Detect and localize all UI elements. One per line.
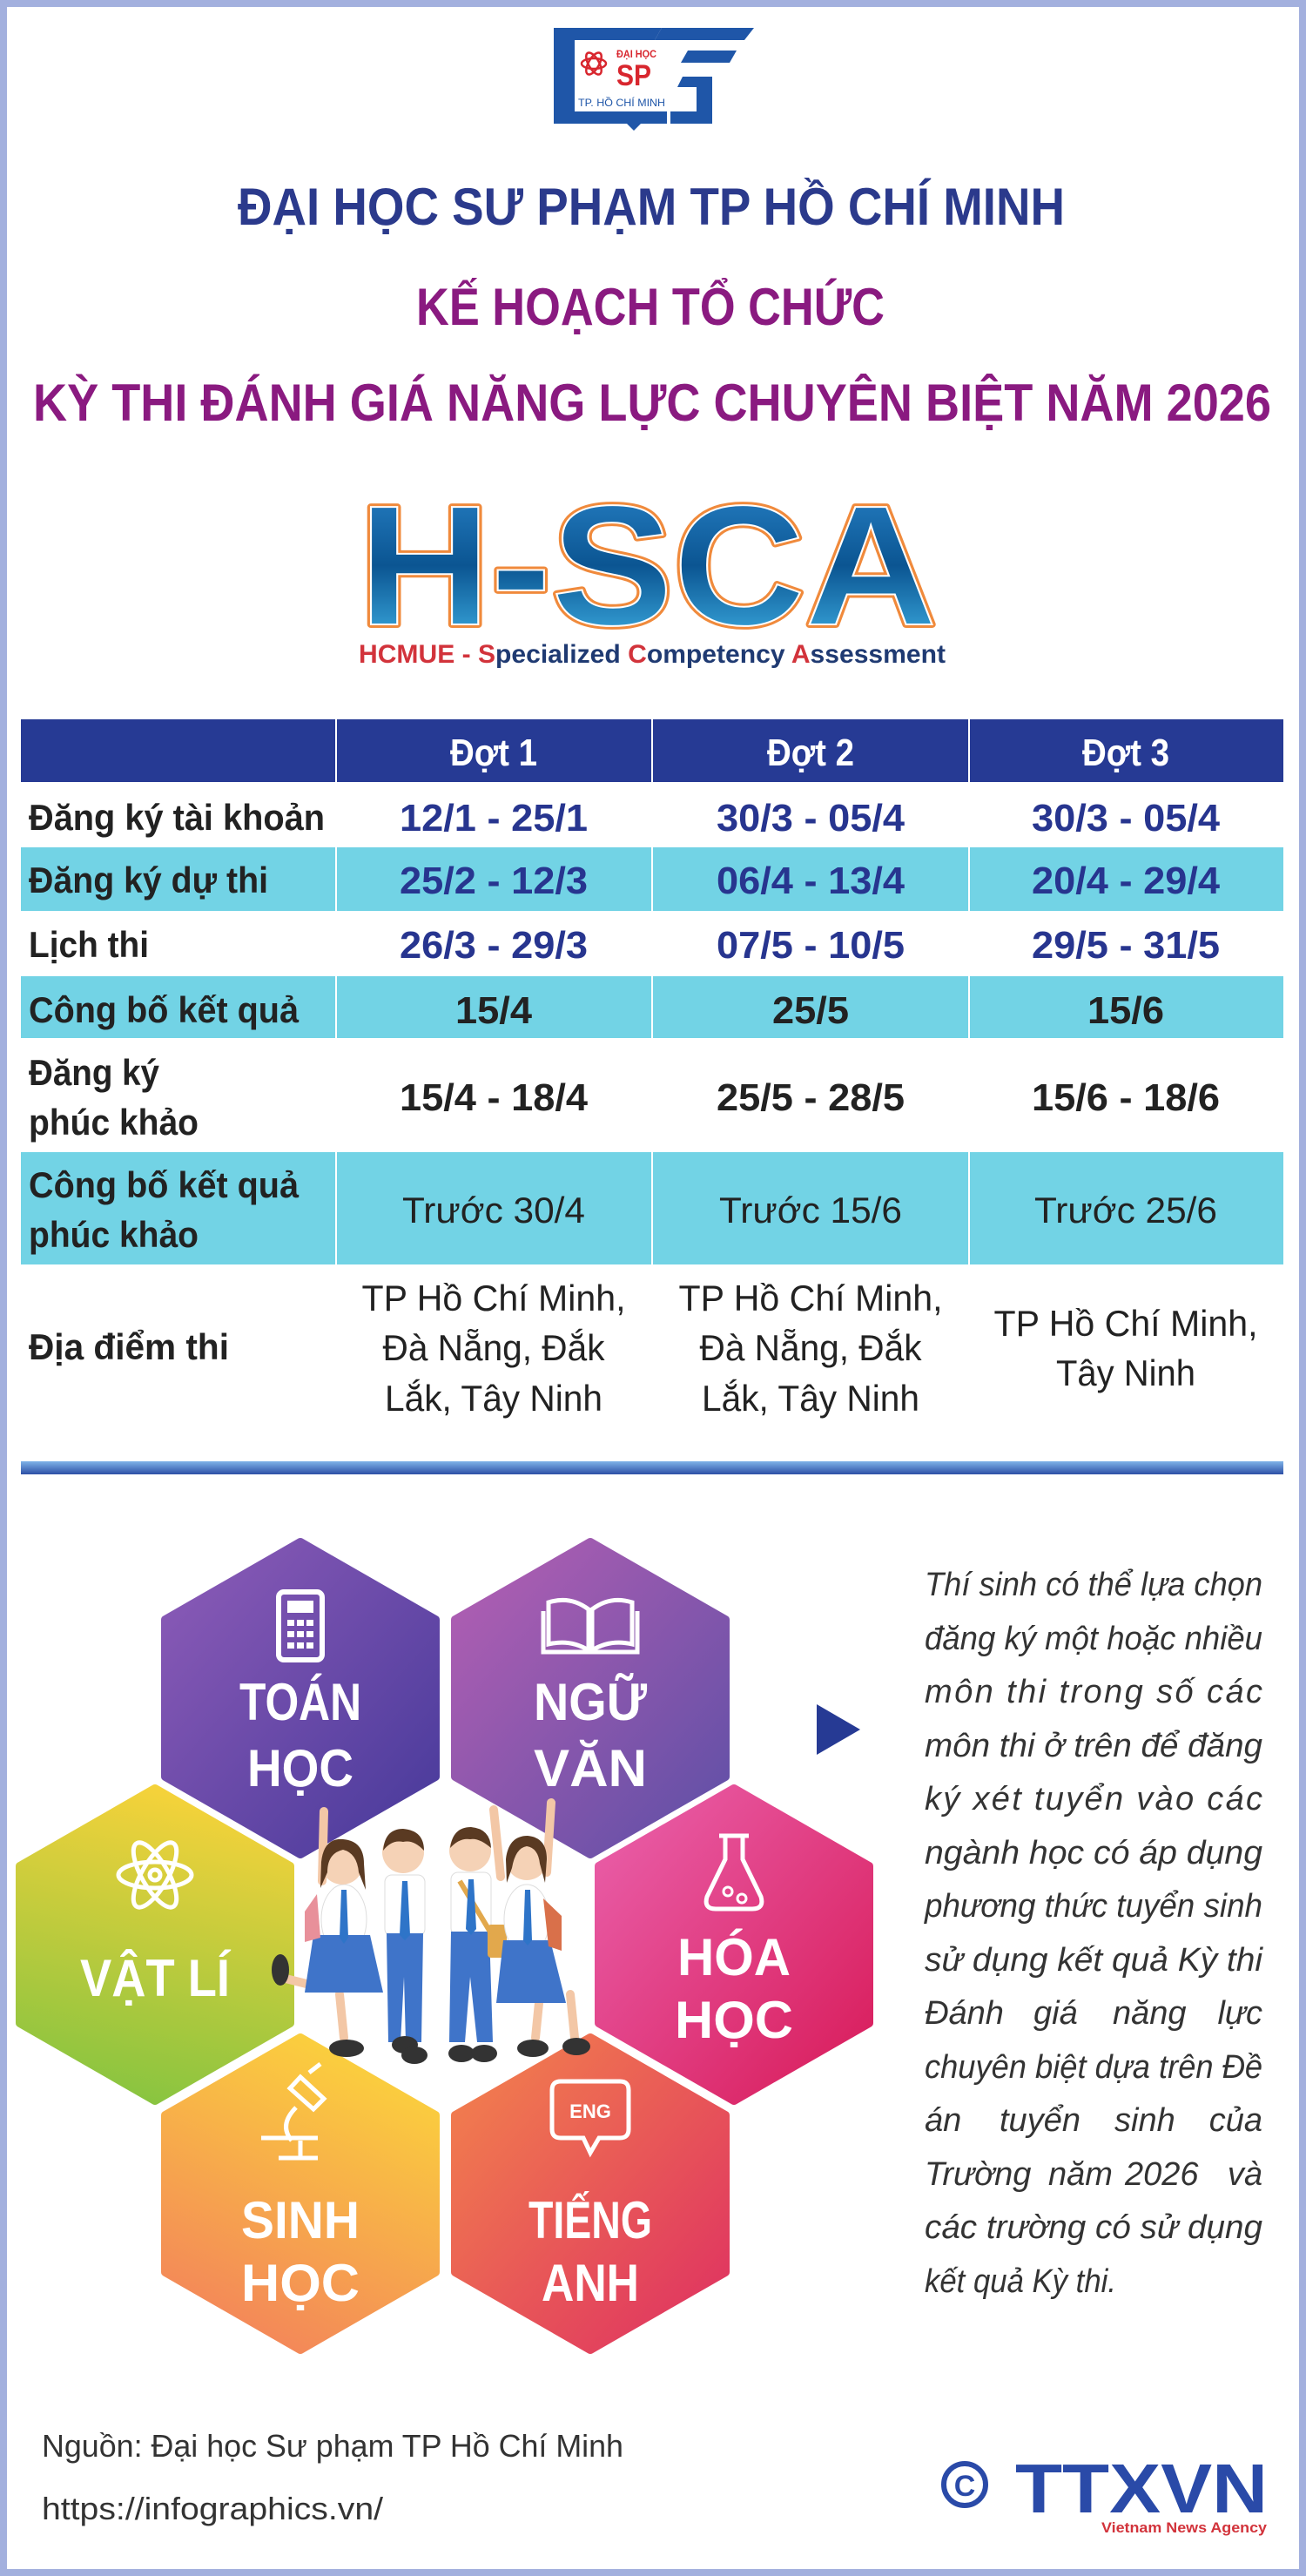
schedule table: Lắk, Tây Ninh: [385, 1378, 603, 1419]
hexagon: Toán học: TOÁN: [239, 1673, 361, 1731]
schedule table: 15/4 - 18/4: [400, 1076, 589, 1119]
schedule table: Trước 30/4: [402, 1190, 585, 1231]
schedule table: Lắk, Tây Ninh: [702, 1378, 919, 1419]
text block: note: giá: [1033, 1995, 1078, 2032]
schedule table: Trước 25/6: [1034, 1190, 1217, 1231]
logo: TTXVN: Vietnam News Agency: [1101, 2519, 1268, 2536]
schedule table: 15/4: [455, 989, 533, 1032]
logo: university: TP. HỒ CHÍ MINH: [578, 96, 665, 109]
hexagon: Hóa học: HỌC: [675, 1991, 793, 2049]
hexagon: Sinh học: HỌC: [241, 2254, 360, 2312]
arrow: [817, 1704, 860, 1755]
schedule table: Công bố kết quả: [29, 1164, 300, 1205]
text block: note: phương thức tuyển sinh: [924, 1888, 1262, 1925]
source: [42, 2428, 623, 2526]
schedule table: 30/3 - 05/4: [717, 797, 905, 840]
source: Nguồn: Đại học Sư phạm TP Hồ Chí Minh: [42, 2428, 623, 2464]
text block: note: của: [1209, 2102, 1262, 2139]
text block: note: ký xét tuyển vào các: [925, 1781, 1262, 1817]
hexagon: Toán học: [165, 1542, 435, 1854]
hexagon: Sinh học: SINH: [241, 2191, 360, 2249]
illustration: students: [272, 1803, 590, 2064]
title: ĐẠI HỌC SƯ PHẠM TP HỒ CHÍ MINH: [238, 178, 1065, 236]
schedule table: Đợt 1: [450, 732, 537, 774]
text block: note: sử dụng kết quả Kỳ thi: [925, 1942, 1264, 1979]
schedule table: Trước 15/6: [719, 1190, 902, 1231]
schedule table: 07/5 - 10/5: [717, 924, 905, 967]
hexagon: Hóa học: [599, 1789, 869, 2101]
hexagon: Ngữ văn: [455, 1542, 725, 1854]
schedule table: phúc khảo: [29, 1214, 199, 1255]
logo: TTXVN: TTXVN: [1015, 2450, 1268, 2527]
schedule table: phúc khảo: [29, 1102, 199, 1143]
schedule table: Đợt 2: [767, 732, 854, 774]
schedule table: 15/6: [1087, 989, 1164, 1032]
schedule table: Đăng ký: [29, 1052, 160, 1093]
text block: note: và: [1228, 2156, 1262, 2193]
hexagon: Vật lí: VẬT LÍ: [80, 1949, 231, 2007]
hexagon: Tiếng Anh: [455, 2038, 725, 2350]
logo: H-SCA: H-SCA: [359, 470, 937, 661]
source: https://infographics.vn/: [42, 2491, 383, 2526]
text block: note: ngành học có áp dụng: [925, 1835, 1262, 1871]
text block: note: tuyển: [1000, 2102, 1080, 2139]
schedule table: 25/5 - 28/5: [717, 1076, 905, 1119]
logo: university: [554, 28, 754, 131]
text block: note: năm: [1048, 2156, 1113, 2193]
text block: note: lực: [1217, 1995, 1262, 2032]
text block: note: môn thi ở trên để đăng: [925, 1728, 1262, 1764]
logo: university: SP: [616, 59, 651, 92]
schedule table: Đà Nẵng, Đắk: [700, 1327, 922, 1368]
title: KẾ HOẠCH TỔ CHỨC: [416, 278, 885, 336]
schedule table: Đăng ký tài khoản: [29, 797, 325, 838]
schedule table: Tây Ninh: [1056, 1352, 1195, 1393]
title: [33, 178, 1271, 432]
schedule table: 20/4 - 29/4: [1032, 860, 1221, 902]
text block: note: Thí sinh có thể lựa chọn: [925, 1567, 1262, 1603]
logo: TTXVN: [944, 2450, 1268, 2536]
hexagon: Tiếng Anh: ANH: [542, 2254, 639, 2312]
logo: H-SCA: HCMUE - Specialized Competency Assessment: [359, 640, 946, 669]
hexagon: Tiếng Anh: ENG: [569, 2101, 611, 2122]
schedule table: TP Hồ Chí Minh,: [679, 1278, 942, 1318]
text block: note: sinh: [1114, 2102, 1175, 2139]
logo: university: ĐẠI HỌC: [616, 48, 656, 60]
text block: note: kết quả Kỳ thi.: [925, 2263, 1116, 2300]
schedule table: 30/3 - 05/4: [1032, 797, 1221, 840]
hexagon: Tiếng Anh: TIẾNG: [528, 2191, 652, 2249]
schedule table: 06/4 - 13/4: [717, 860, 905, 902]
schedule table: Địa điểm thi: [29, 1326, 229, 1367]
schedule table: [21, 719, 1283, 1446]
text block: note: các trường có sử dụng: [925, 2209, 1262, 2246]
schedule table: 25/5: [772, 989, 849, 1032]
text block: note: án: [925, 2102, 961, 2139]
text block: note: 2026: [1124, 2156, 1199, 2193]
schedule table: 12/1 - 25/1: [400, 797, 588, 840]
hexagon: Hóa học: HÓA: [677, 1928, 791, 1986]
text block: note: Trường: [925, 2156, 1031, 2193]
schedule table: Đăng ký dự thi: [29, 860, 268, 900]
hexagon: Ngữ văn: NGỮ: [534, 1673, 647, 1731]
hexagon: Vật lí: [20, 1789, 290, 2101]
schedule table: 25/2 - 12/3: [400, 860, 588, 902]
hexagon: Toán học: HỌC: [247, 1739, 353, 1797]
schedule table: TP Hồ Chí Minh,: [362, 1278, 625, 1318]
hexagon: Sinh học: [165, 2038, 435, 2350]
text block: note: môn thi trong số các: [925, 1674, 1262, 1710]
logo: H-SCA: H-SCA: [359, 470, 937, 661]
schedule table: 15/6 - 18/6: [1032, 1076, 1220, 1119]
hexagon: Ngữ văn: VĂN: [534, 1739, 647, 1797]
schedule table: TP Hồ Chí Minh,: [994, 1303, 1257, 1344]
divider bar: [21, 1461, 1283, 1474]
text block: note: [924, 1567, 1264, 2300]
schedule table: Công bố kết quả: [29, 989, 300, 1030]
schedule table: 29/5 - 31/5: [1032, 924, 1220, 967]
schedule table: Lịch thi: [29, 924, 149, 965]
schedule table: Đợt 3: [1082, 732, 1169, 774]
text block: note: năng: [1113, 1995, 1187, 2032]
text block: note: đăng ký một hoặc nhiều: [925, 1621, 1262, 1657]
schedule table: Đà Nẵng, Đắk: [383, 1327, 605, 1368]
logo: TTXVN: C: [954, 2470, 975, 2503]
text block: note: Đánh: [925, 1995, 1004, 2032]
schedule table: 26/3 - 29/3: [400, 924, 588, 967]
text block: note: chuyên biệt dựa trên Đề: [925, 2049, 1262, 2086]
